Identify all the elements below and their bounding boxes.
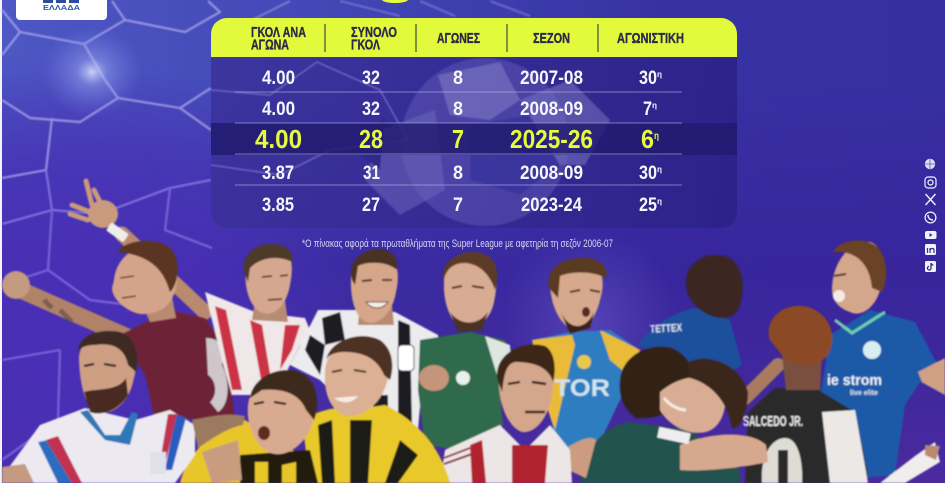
row 4: [262, 163, 662, 184]
icon: X: [926, 194, 936, 205]
social icons: [925, 159, 936, 272]
row 3 highlighted: 28: [359, 124, 383, 154]
table header: [211, 18, 737, 57]
player: right blue jersey: ie strom: [827, 372, 882, 389]
player: yellow blue jersey: [532, 258, 640, 452]
player: hugging pair green jersey: [566, 347, 768, 483]
player: AEK right yellow black jersey: [302, 336, 450, 483]
row 2: 7: [643, 99, 652, 120]
row 1: η: [657, 70, 662, 79]
row 2: η: [652, 101, 657, 110]
row 1: 32: [362, 68, 380, 89]
player: right blue jersey: live elite: [850, 390, 878, 397]
sponsor logo box: [16, 0, 107, 20]
row 2: 2008-09: [520, 99, 583, 120]
table header: ΣΥΝΟΛΟ: [351, 25, 397, 41]
football watermark: [355, 58, 610, 226]
table header: ΓΚΟΛ: [351, 38, 380, 54]
row 3 highlighted: 2025-26: [510, 124, 593, 154]
row 5: 7: [453, 195, 463, 216]
row 2: [262, 99, 657, 120]
row 4: 31: [363, 163, 380, 184]
player: AEK left yellow black jersey: [180, 370, 320, 483]
footnote: *Ο πίνακας αφορά τα πρωταθλήματα της Super League με αφετηρία τη σεζόν 2006-07: [302, 238, 613, 250]
row 5: 3.85: [262, 195, 294, 216]
row 5: 2023-24: [521, 195, 582, 216]
icon: tiktok: [925, 261, 936, 272]
player: raised arm maroon jersey: [2, 181, 235, 420]
row 5: 27: [362, 195, 380, 216]
player: left white jersey: [2, 331, 245, 483]
table body: [211, 57, 737, 228]
player: Olympiacos red white jersey: [440, 344, 572, 483]
goal net pattern: [2, 1, 530, 460]
row 5: 25: [639, 195, 657, 216]
sponsor logo box: ΕΛΛΑΔΑ: [43, 5, 80, 12]
row 1: [262, 68, 662, 89]
row 3 highlighted: η: [654, 131, 659, 142]
row 4: 3.87: [262, 163, 294, 184]
icon: website: [925, 159, 935, 169]
row 1: 30: [639, 68, 657, 89]
player: Tettey back view: [638, 255, 743, 390]
icon: linkedin: [925, 244, 936, 255]
table header: ΑΓΩΝΑ: [251, 38, 289, 54]
icon: viber: [925, 212, 936, 223]
row 4: η: [657, 165, 662, 174]
light flare: [40, 26, 144, 118]
net lines inside table: [211, 62, 408, 175]
row 1: 2007-08: [520, 68, 583, 89]
row 3 highlighted: 4.00: [255, 124, 302, 154]
player: Tettey back view: TETTEX: [650, 322, 683, 336]
player: PAOK black white jersey: [290, 249, 440, 430]
row 1: 4.00: [262, 68, 295, 89]
row 4: 2008-09: [520, 163, 583, 184]
table panel: [211, 18, 737, 228]
row 5: [262, 195, 662, 216]
player: red white striped jersey: [205, 244, 318, 395]
row 4: 8: [453, 163, 463, 184]
table header: ΓΚΟΛ ΑΝΑ: [251, 25, 306, 41]
row 4: 30: [639, 163, 657, 184]
player: Salcedo jersey back: [743, 306, 940, 483]
row 3 highlighted: 6: [641, 124, 654, 154]
player: Salcedo jersey back: SALCEDO JR.: [743, 413, 803, 430]
row 2: 32: [362, 99, 380, 120]
table header: ΑΓΩΝΙΣΤΙΚΗ: [617, 31, 684, 47]
row 5: η: [657, 197, 662, 206]
highlighted row band: [211, 123, 737, 155]
row 2: 8: [453, 99, 463, 120]
player: Panathinaikos green jersey: [418, 252, 512, 450]
row dividers: [235, 92, 682, 185]
row 3 highlighted: [255, 124, 659, 154]
icon: instagram: [925, 177, 936, 188]
yellow circle top: [382, 0, 408, 3]
row 1: 8: [453, 68, 463, 89]
player: yellow blue jersey: TOR: [554, 375, 610, 402]
table header: ΣΕΖΟΝ: [533, 31, 570, 47]
row 3 highlighted: 7: [452, 124, 464, 154]
player: right blue jersey: [745, 240, 945, 478]
players group photo: [2, 181, 945, 483]
icon: youtube: [925, 231, 936, 239]
table header: ΑΓΩΝΕΣ: [437, 31, 480, 47]
row 2: 4.00: [262, 99, 295, 120]
